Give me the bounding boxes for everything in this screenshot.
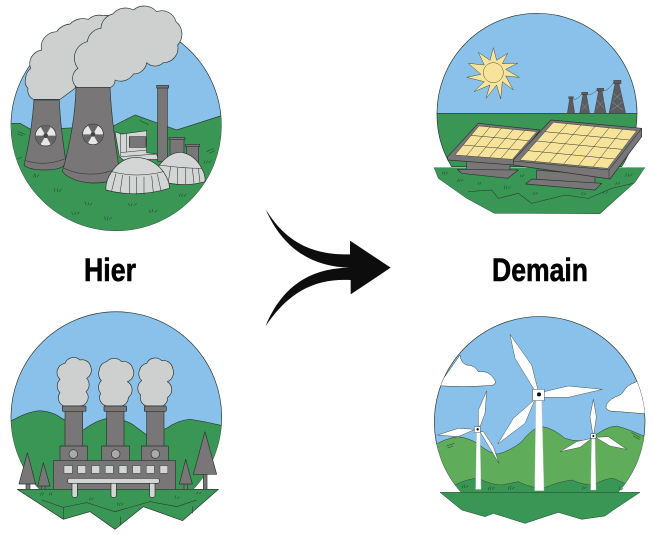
front reactor dome [106,157,169,195]
right solar panel [513,120,642,179]
left panel stand [457,160,518,178]
heading: Hier: Hier [84,252,136,288]
right panel stand [526,170,602,190]
sky disc [11,312,222,489]
green hills [10,115,223,233]
island base [440,492,640,523]
island base [17,489,218,529]
panel: wind farm (tomorrow) [433,317,648,523]
heading: Demain: Demain [492,252,588,288]
grass tufts [41,492,201,505]
tall chimney [157,85,169,161]
ground disc [437,113,637,167]
sky half disc [437,13,637,113]
sky disc [434,317,645,492]
grass tufts [442,172,632,195]
transmission towers [567,80,626,113]
front dark hill [445,478,638,492]
pines [19,432,217,490]
left wind turbine [438,391,499,489]
gauges [69,450,160,458]
front cooling tower [62,87,120,183]
light green hills [433,426,648,493]
grass tufts [17,121,215,220]
icon: sun [467,48,519,99]
island base [434,167,645,214]
back cooling tower [24,100,66,170]
pipe [68,478,159,497]
panel: solar farm (tomorrow) [434,13,645,214]
right wind turbine [560,399,627,490]
large wind turbine [498,334,602,491]
short stacks [169,137,200,163]
chimneys [60,406,168,461]
back smoke cloud [25,15,115,99]
sky disc [11,20,221,231]
rear reactor dome [157,152,205,185]
left solar panel [448,123,540,165]
icon: radiation symbol [35,125,56,146]
reactor control building [115,131,158,160]
panel: nuclear plant (yesterday) [10,6,223,233]
icon: radiation symbol [83,124,103,145]
front smoke cloud [73,6,182,87]
smoke plumes [57,358,174,406]
green hills [10,411,223,490]
windows [64,466,168,473]
clouds [438,355,648,414]
factory building [53,461,176,490]
panel: coal factory (yesterday) [10,312,223,529]
grass tufts [447,433,640,490]
arrow [266,209,391,326]
